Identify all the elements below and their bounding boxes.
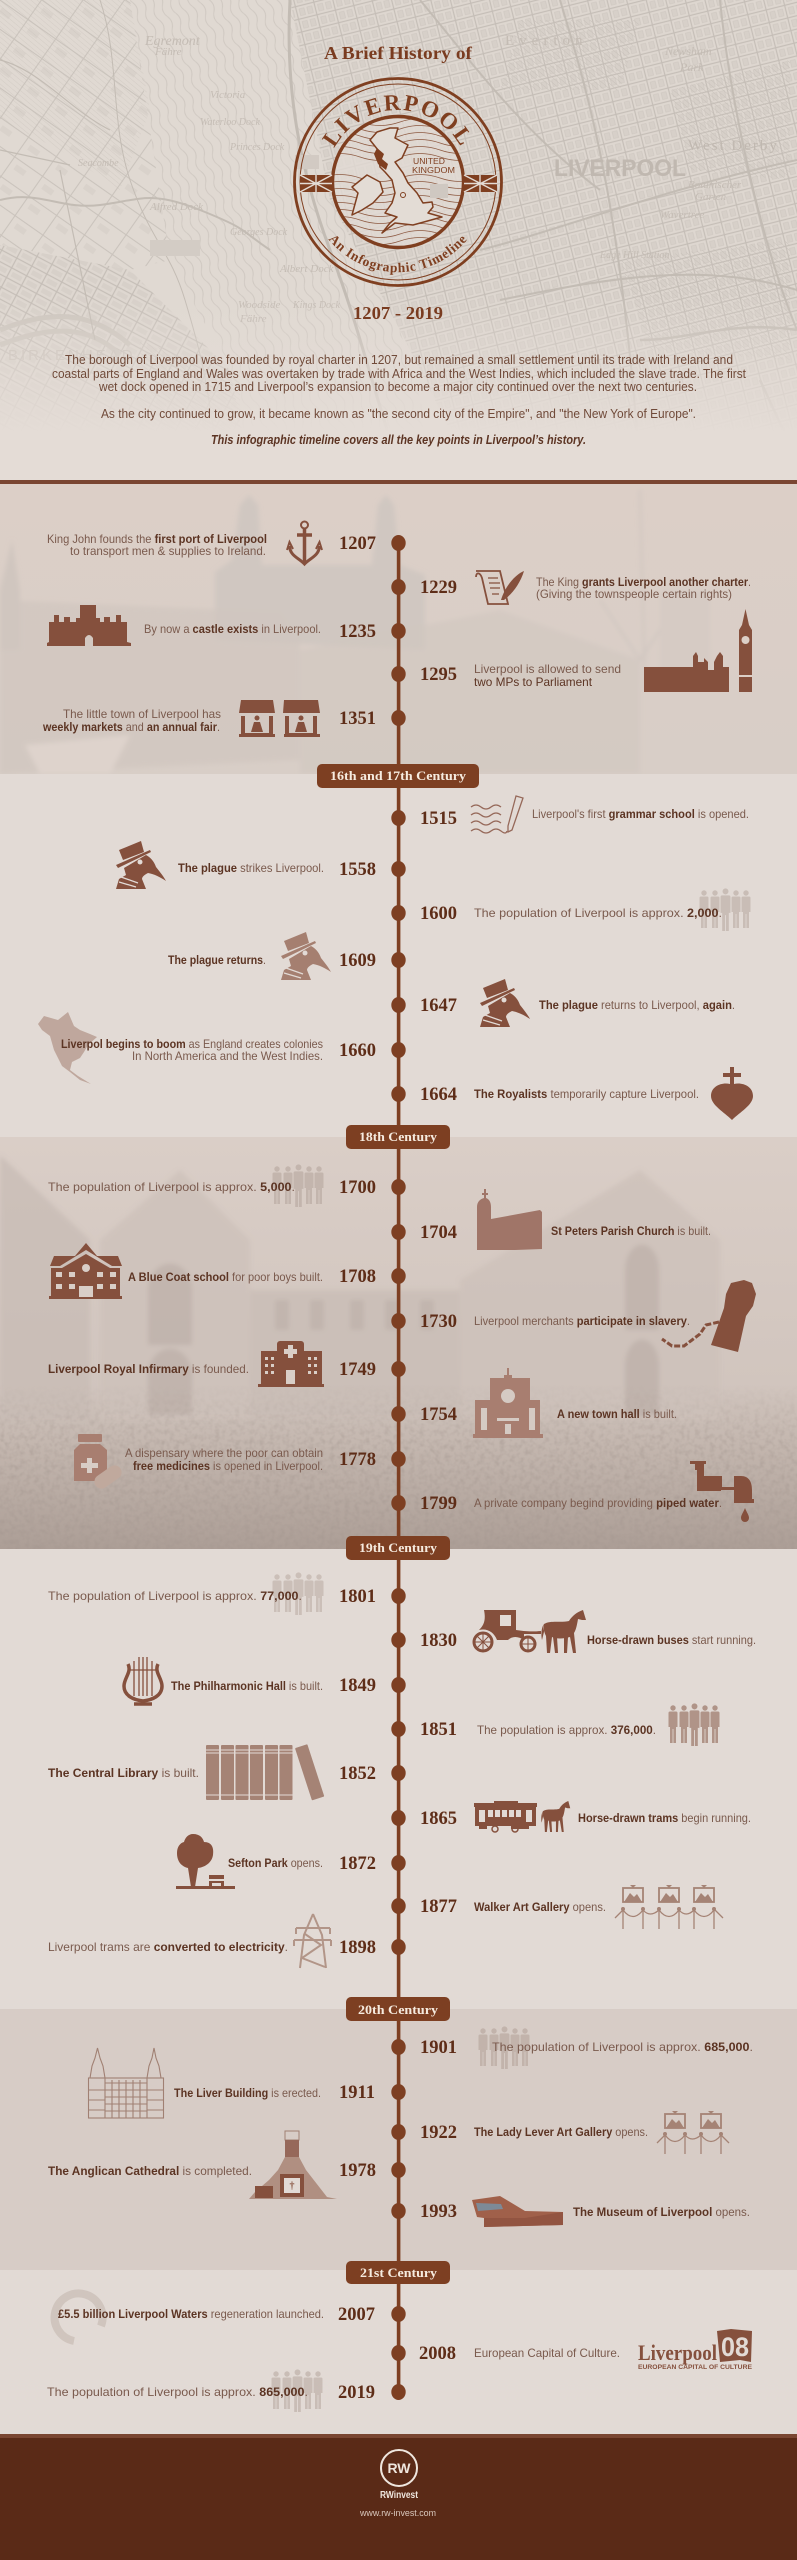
event: 1978 bbox=[48, 2131, 406, 2199]
event: 1660: In North America and the West Indies. bbox=[132, 1049, 323, 1063]
event: 1799: 1799 bbox=[420, 1494, 457, 1514]
event: 1898: Liverpool trams are converted to electricity. bbox=[48, 1940, 288, 1954]
event: 1515 bbox=[391, 796, 749, 833]
map place names: Everton bbox=[505, 33, 587, 49]
event: 1865: 1865 bbox=[420, 1809, 457, 1829]
icon: Liver Building bbox=[88, 2048, 164, 2118]
panel: header map background bbox=[0, 0, 797, 480]
icon: pencil and writing bbox=[471, 796, 523, 833]
map place names: Edge Hill Station bbox=[599, 250, 669, 261]
event: 1235: 1235 bbox=[339, 622, 376, 642]
logo: RW Invest: RW bbox=[387, 2460, 411, 2476]
event: 1664 bbox=[391, 1067, 753, 1120]
icon: dripping tap bbox=[690, 1461, 754, 1522]
map place names: Garten bbox=[695, 191, 727, 203]
panel: 16th and 17th century background bbox=[0, 774, 797, 1137]
century label: 18th Century: 18th Century bbox=[359, 1129, 438, 1144]
event: 1351 bbox=[42, 700, 406, 737]
century label: 18th Century bbox=[346, 1125, 450, 1149]
map place names: BIRKENHEAD bbox=[8, 347, 136, 364]
event: 1830 bbox=[391, 1610, 756, 1653]
event: 2007: £5.5 billion Liverpool Waters regeneration launched. bbox=[58, 2307, 324, 2321]
event: 1235: By now a castle exists in Liverpool. bbox=[144, 622, 321, 636]
event: 2008 bbox=[391, 2329, 752, 2371]
icon: people bbox=[272, 1572, 324, 1615]
event: 1849 bbox=[124, 1657, 406, 1704]
event: 1778: A dispensary where the poor can obtain bbox=[125, 1446, 323, 1460]
century label: 20th Century bbox=[346, 1997, 450, 2021]
icon: lyre bbox=[124, 1657, 162, 1704]
century label: 19th Century: 19th Century bbox=[359, 1540, 438, 1555]
panel: medieval photo background bbox=[0, 483, 797, 774]
icon: scroll and quill bbox=[476, 571, 524, 604]
event: 1978: The Anglican Cathedral is completed. bbox=[48, 2164, 252, 2178]
intro text: wet dock opened in 1715 and Liverpool’s expansion to become a major city continued over the next two centuries. bbox=[98, 379, 697, 394]
event: 1664: The Royalists temporarily capture Liverpool. bbox=[474, 1087, 699, 1101]
icon: people bbox=[272, 1164, 324, 1207]
event: 1877: Walker Art Gallery opens. bbox=[474, 1900, 606, 1914]
event: 1207: 1207 bbox=[339, 534, 376, 554]
map place names: Albert Dock bbox=[279, 263, 335, 275]
event: 1911: The Liver Building is erected. bbox=[174, 2086, 321, 2100]
event: 1515: Liverpool's first grammar school is opened. bbox=[532, 807, 749, 821]
event: 1778: 1778 bbox=[339, 1450, 376, 1470]
event: 1754: A new town hall is built. bbox=[557, 1407, 677, 1421]
panel: 21st century background bbox=[0, 2270, 797, 2434]
event: 2007: 2007 bbox=[338, 2305, 375, 2325]
event: 1700 bbox=[48, 1164, 406, 1207]
event: 1295: two MPs to Parliament bbox=[474, 675, 593, 689]
event: 1700: The population of Liverpool is approx. 5,000. bbox=[48, 1180, 295, 1194]
map place names: West Derby bbox=[688, 138, 779, 154]
icon: people bbox=[668, 1703, 720, 1746]
event: 2019: 2019 bbox=[338, 2383, 375, 2403]
map place names: Wavertree bbox=[660, 209, 705, 221]
event: 1229: 1229 bbox=[420, 578, 457, 598]
logo: RW Invest: RWinvest bbox=[380, 2490, 419, 2501]
event: 1852: 1852 bbox=[339, 1764, 376, 1784]
event: 1872: Sefton Park opens. bbox=[228, 1856, 323, 1870]
icon: carriage and horse bbox=[474, 1610, 586, 1653]
event: 1749: 1749 bbox=[339, 1360, 376, 1380]
map place names: Princes Dock bbox=[229, 142, 285, 153]
event: 1849: 1849 bbox=[339, 1676, 376, 1696]
map place names bbox=[8, 33, 779, 364]
century label: 20th Century: 20th Century bbox=[358, 2002, 439, 2017]
event: 1660 bbox=[38, 1012, 406, 1084]
map place names: Botanischer bbox=[688, 179, 742, 191]
event: 1877 bbox=[391, 1885, 723, 1929]
event: 1351: weekly markets and an annual fair. bbox=[42, 720, 220, 734]
event: 1708 bbox=[49, 1243, 406, 1299]
event: 1877: 1877 bbox=[420, 1897, 457, 1917]
event: 1609 bbox=[168, 932, 406, 980]
event: 1801: The population of Liverpool is approx. 77,000. bbox=[48, 1589, 302, 1603]
event: 1295: Liverpool is allowed to send bbox=[474, 662, 621, 676]
map place names: Woodside bbox=[238, 299, 280, 311]
event: 1207 bbox=[47, 522, 406, 564]
map place names: Fähre bbox=[154, 46, 182, 58]
event: 2007 bbox=[55, 2293, 406, 2341]
icon: hospital bbox=[258, 1341, 324, 1387]
event: 1852 bbox=[48, 1744, 406, 1800]
event: 1901: 1901 bbox=[420, 2038, 457, 2058]
event: 1799: A private company begind providing piped water. bbox=[474, 1496, 722, 1510]
intro text: coastal parts of England and Wales was overtaken by trade with Africa and the West Indies, which included the slave trade. The first bbox=[52, 366, 746, 381]
map place names: Victoria bbox=[210, 89, 246, 101]
map place names: Georges Dock bbox=[230, 227, 288, 238]
event: 1801: 1801 bbox=[339, 1587, 376, 1607]
map place names: LIVERPOOL bbox=[554, 155, 686, 182]
event: 1851: 1851 bbox=[420, 1720, 457, 1740]
century label: 19th Century bbox=[346, 1536, 450, 1560]
heading: a brief history of: A Brief History of bbox=[324, 43, 473, 63]
icon: school bbox=[49, 1243, 122, 1299]
icon: plague doctor bbox=[480, 979, 530, 1027]
event: 1647: The plague returns to Liverpool, again. bbox=[539, 998, 735, 1012]
event: 1235 bbox=[47, 605, 406, 646]
event: 1754: 1754 bbox=[420, 1405, 457, 1425]
icon: heart and cross bbox=[711, 1067, 753, 1120]
icon: plague doctor bbox=[116, 841, 166, 889]
event: 1901 bbox=[391, 2026, 753, 2069]
icon: Liverpool 08 logo bbox=[638, 2329, 752, 2371]
UK map with contour lines bbox=[334, 118, 462, 246]
map place names: Park bbox=[679, 60, 704, 74]
icon: church bbox=[477, 1189, 542, 1250]
event: 1704 bbox=[391, 1189, 711, 1250]
map place names: Egremont bbox=[144, 34, 201, 49]
icon: Anglican Cathedral bbox=[249, 2131, 337, 2199]
event: 1898: 1898 bbox=[339, 1938, 376, 1958]
UK map with contour lines: UNITED bbox=[413, 157, 445, 166]
icon: art gallery bbox=[615, 1885, 723, 1929]
panel: 19th century background bbox=[0, 1549, 797, 2009]
map place names: Newsham bbox=[664, 44, 712, 58]
icon: parliament and Big Ben bbox=[644, 609, 753, 692]
icon: Anglican Cathedral: † bbox=[290, 2181, 294, 2192]
icon: art gallery bbox=[657, 2111, 729, 2154]
event: 2019 bbox=[47, 2369, 406, 2412]
event: 1700: 1700 bbox=[339, 1178, 376, 1198]
header divider bar bbox=[0, 480, 797, 484]
event: 1730: Liverpool merchants participate in slavery. bbox=[474, 1314, 690, 1328]
icon: horse-drawn tram bbox=[474, 1801, 570, 1832]
map place names: Alfred Dock bbox=[149, 201, 204, 213]
event: 1558: 1558 bbox=[339, 860, 376, 880]
event: 1849: The Philharmonic Hall is built. bbox=[171, 1679, 323, 1693]
event: 1799 bbox=[391, 1461, 754, 1522]
event: 1207: King John founds the first port of Liverpool bbox=[47, 532, 267, 546]
event: 1515: 1515 bbox=[420, 809, 457, 829]
event: 1749 bbox=[48, 1341, 406, 1387]
icon: town hall bbox=[473, 1368, 543, 1438]
event: 1730 bbox=[391, 1280, 756, 1352]
icon: people bbox=[700, 888, 750, 931]
event: 1295: 1295 bbox=[420, 665, 457, 685]
icon: market stalls bbox=[239, 700, 320, 737]
event: 1898 bbox=[48, 1914, 406, 1968]
event: 1704: St Peters Parish Church is built. bbox=[551, 1224, 711, 1238]
event: 1865: Horse-drawn trams begin running. bbox=[578, 1811, 751, 1825]
event: 1911 bbox=[88, 2048, 406, 2118]
event: 1730: 1730 bbox=[420, 1312, 457, 1332]
icon: tree and bench bbox=[176, 1834, 235, 1889]
seal: Liverpool badge bbox=[293, 77, 503, 287]
event: 1801 bbox=[48, 1572, 406, 1615]
seal subtitle: An Infographic Timeline bbox=[328, 236, 467, 275]
event: 1851: The population is approx. 376,000. bbox=[477, 1723, 656, 1737]
century label: 16th and 17th Century: 16th and 17th Century bbox=[330, 768, 467, 783]
map place names: Waterloo Dock bbox=[200, 117, 260, 128]
icon: Museum of Liverpool bbox=[472, 2196, 563, 2227]
event: 1229: (Giving the townspeople certain rights) bbox=[536, 587, 732, 601]
intro text bbox=[52, 352, 746, 447]
icon: plague doctor bbox=[281, 932, 331, 980]
event: 1901: The population of Liverpool is approx. 685,000. bbox=[492, 2040, 753, 2054]
event: 1993 bbox=[391, 2196, 750, 2227]
event: 1647 bbox=[391, 979, 735, 1027]
event: 1229: The King grants Liverpool another charter. bbox=[536, 575, 751, 589]
website: www.rw-invest.com bbox=[359, 2508, 436, 2518]
event: 1558 bbox=[116, 841, 406, 889]
event: 1600: The population of Liverpool is approx. 2,000. bbox=[474, 906, 722, 920]
event: 1754 bbox=[391, 1368, 677, 1438]
icon: people bbox=[272, 2369, 322, 2412]
event: 1993: The Museum of Liverpool opens. bbox=[573, 2205, 750, 2219]
icon: anchor bbox=[287, 522, 322, 564]
event: 1911: 1911 bbox=[339, 2083, 375, 2103]
event: 1704: 1704 bbox=[420, 1223, 457, 1243]
logo: RW Invest bbox=[380, 2450, 419, 2501]
icon: Liverpool 08 logo: EUROPEAN CAPITAL OF CULTURE bbox=[638, 2365, 752, 2371]
event: 1708: 1708 bbox=[339, 1267, 376, 1287]
event: 1993: 1993 bbox=[420, 2202, 457, 2222]
event: 1660: Liverpol begins to boom as England creates colonies bbox=[61, 1037, 323, 1051]
century label: 21st Century bbox=[346, 2261, 450, 2284]
event: 1830: 1830 bbox=[420, 1631, 457, 1651]
flag bands bbox=[300, 175, 497, 192]
icon: electricity pylon bbox=[294, 1914, 331, 1968]
intro text: This infographic timeline covers all the key points in Liverpool’s history. bbox=[211, 432, 586, 447]
seal title: LIVERPOOL bbox=[322, 95, 470, 148]
event: 1351: The little town of Liverpool has bbox=[63, 707, 221, 721]
event: 2019: The population of Liverpool is approx. 865,000. bbox=[47, 2385, 308, 2399]
event: 1558: The plague strikes Liverpool. bbox=[178, 861, 324, 875]
event: 1664: 1664 bbox=[420, 1085, 457, 1105]
event: 1600: 1600 bbox=[420, 904, 457, 924]
icon: castle bbox=[47, 605, 131, 646]
icon: people bbox=[478, 2026, 530, 2069]
timeline spine bbox=[397, 543, 400, 2392]
event: 1830: Horse-drawn buses start running. bbox=[587, 1633, 756, 1647]
intro text: As the city continued to grow, it became known as "the second city of the Empire", and "the New York of Europe". bbox=[101, 406, 696, 421]
event: 1647: 1647 bbox=[420, 996, 457, 1016]
event: 1609: 1609 bbox=[339, 951, 376, 971]
event: 1851 bbox=[391, 1703, 720, 1746]
event: 1922 bbox=[391, 2111, 729, 2154]
panel: 20th century background bbox=[0, 2009, 797, 2270]
event: 1600 bbox=[391, 888, 750, 931]
date range: 1207 - 2019 bbox=[353, 303, 443, 323]
map place names: Seacombe bbox=[78, 158, 119, 169]
event: 1351: 1351 bbox=[339, 709, 376, 729]
map place names: Kings Dock bbox=[292, 300, 340, 311]
event: 1922: 1922 bbox=[420, 2123, 457, 2143]
event: 1922: The Lady Lever Art Gallery opens. bbox=[474, 2125, 648, 2139]
event: 1778 bbox=[74, 1434, 406, 1491]
panel: 18th century photo background bbox=[0, 1137, 797, 1549]
event: 1978: 1978 bbox=[339, 2161, 376, 2181]
event: 1660: 1660 bbox=[339, 1041, 376, 1061]
century label: 16th and 17th Century bbox=[317, 764, 479, 788]
icon: books bbox=[206, 1744, 324, 1800]
icon: Liverpool 08 logo: Liverpool bbox=[638, 2340, 717, 2365]
event: 1865 bbox=[391, 1801, 751, 1832]
century label: 21st Century: 21st Century bbox=[360, 2265, 438, 2280]
map place names: Fähre bbox=[239, 313, 267, 325]
event: 2008: 2008 bbox=[419, 2344, 456, 2364]
event: 1872 bbox=[176, 1834, 406, 1889]
icon: arc bbox=[55, 2293, 103, 2341]
event: 1609: The plague returns. bbox=[168, 953, 266, 967]
event: 1207: to transport men & supplies to Ireland. bbox=[70, 544, 266, 558]
event: 1229 bbox=[391, 571, 751, 604]
icon: Liverpool 08 logo: 08 bbox=[721, 2332, 749, 2362]
icon: North America map bbox=[38, 1012, 97, 1084]
icon: medicine bottle and pill bbox=[74, 1434, 124, 1491]
event: 2008: European Capital of Culture. bbox=[474, 2346, 620, 2360]
event: 1852: The Central Library is built. bbox=[48, 1766, 199, 1780]
UK map with contour lines: KINGDOM bbox=[412, 166, 455, 175]
event: 1872: 1872 bbox=[339, 1854, 376, 1874]
icon: fist with broken chain bbox=[662, 1280, 756, 1352]
event: 1295 bbox=[391, 609, 753, 692]
event: 1708: A Blue Coat school for poor boys built. bbox=[128, 1270, 323, 1284]
event: 1749: Liverpool Royal Infirmary is founded. bbox=[48, 1362, 249, 1376]
panel: footer bbox=[0, 2434, 797, 2560]
event: 1778: free medicines is opened in Liverpool. bbox=[133, 1459, 323, 1473]
intro text: The borough of Liverpool was founded by royal charter in 1207, but remained a small settlement until its trade with Ireland and bbox=[65, 352, 733, 367]
